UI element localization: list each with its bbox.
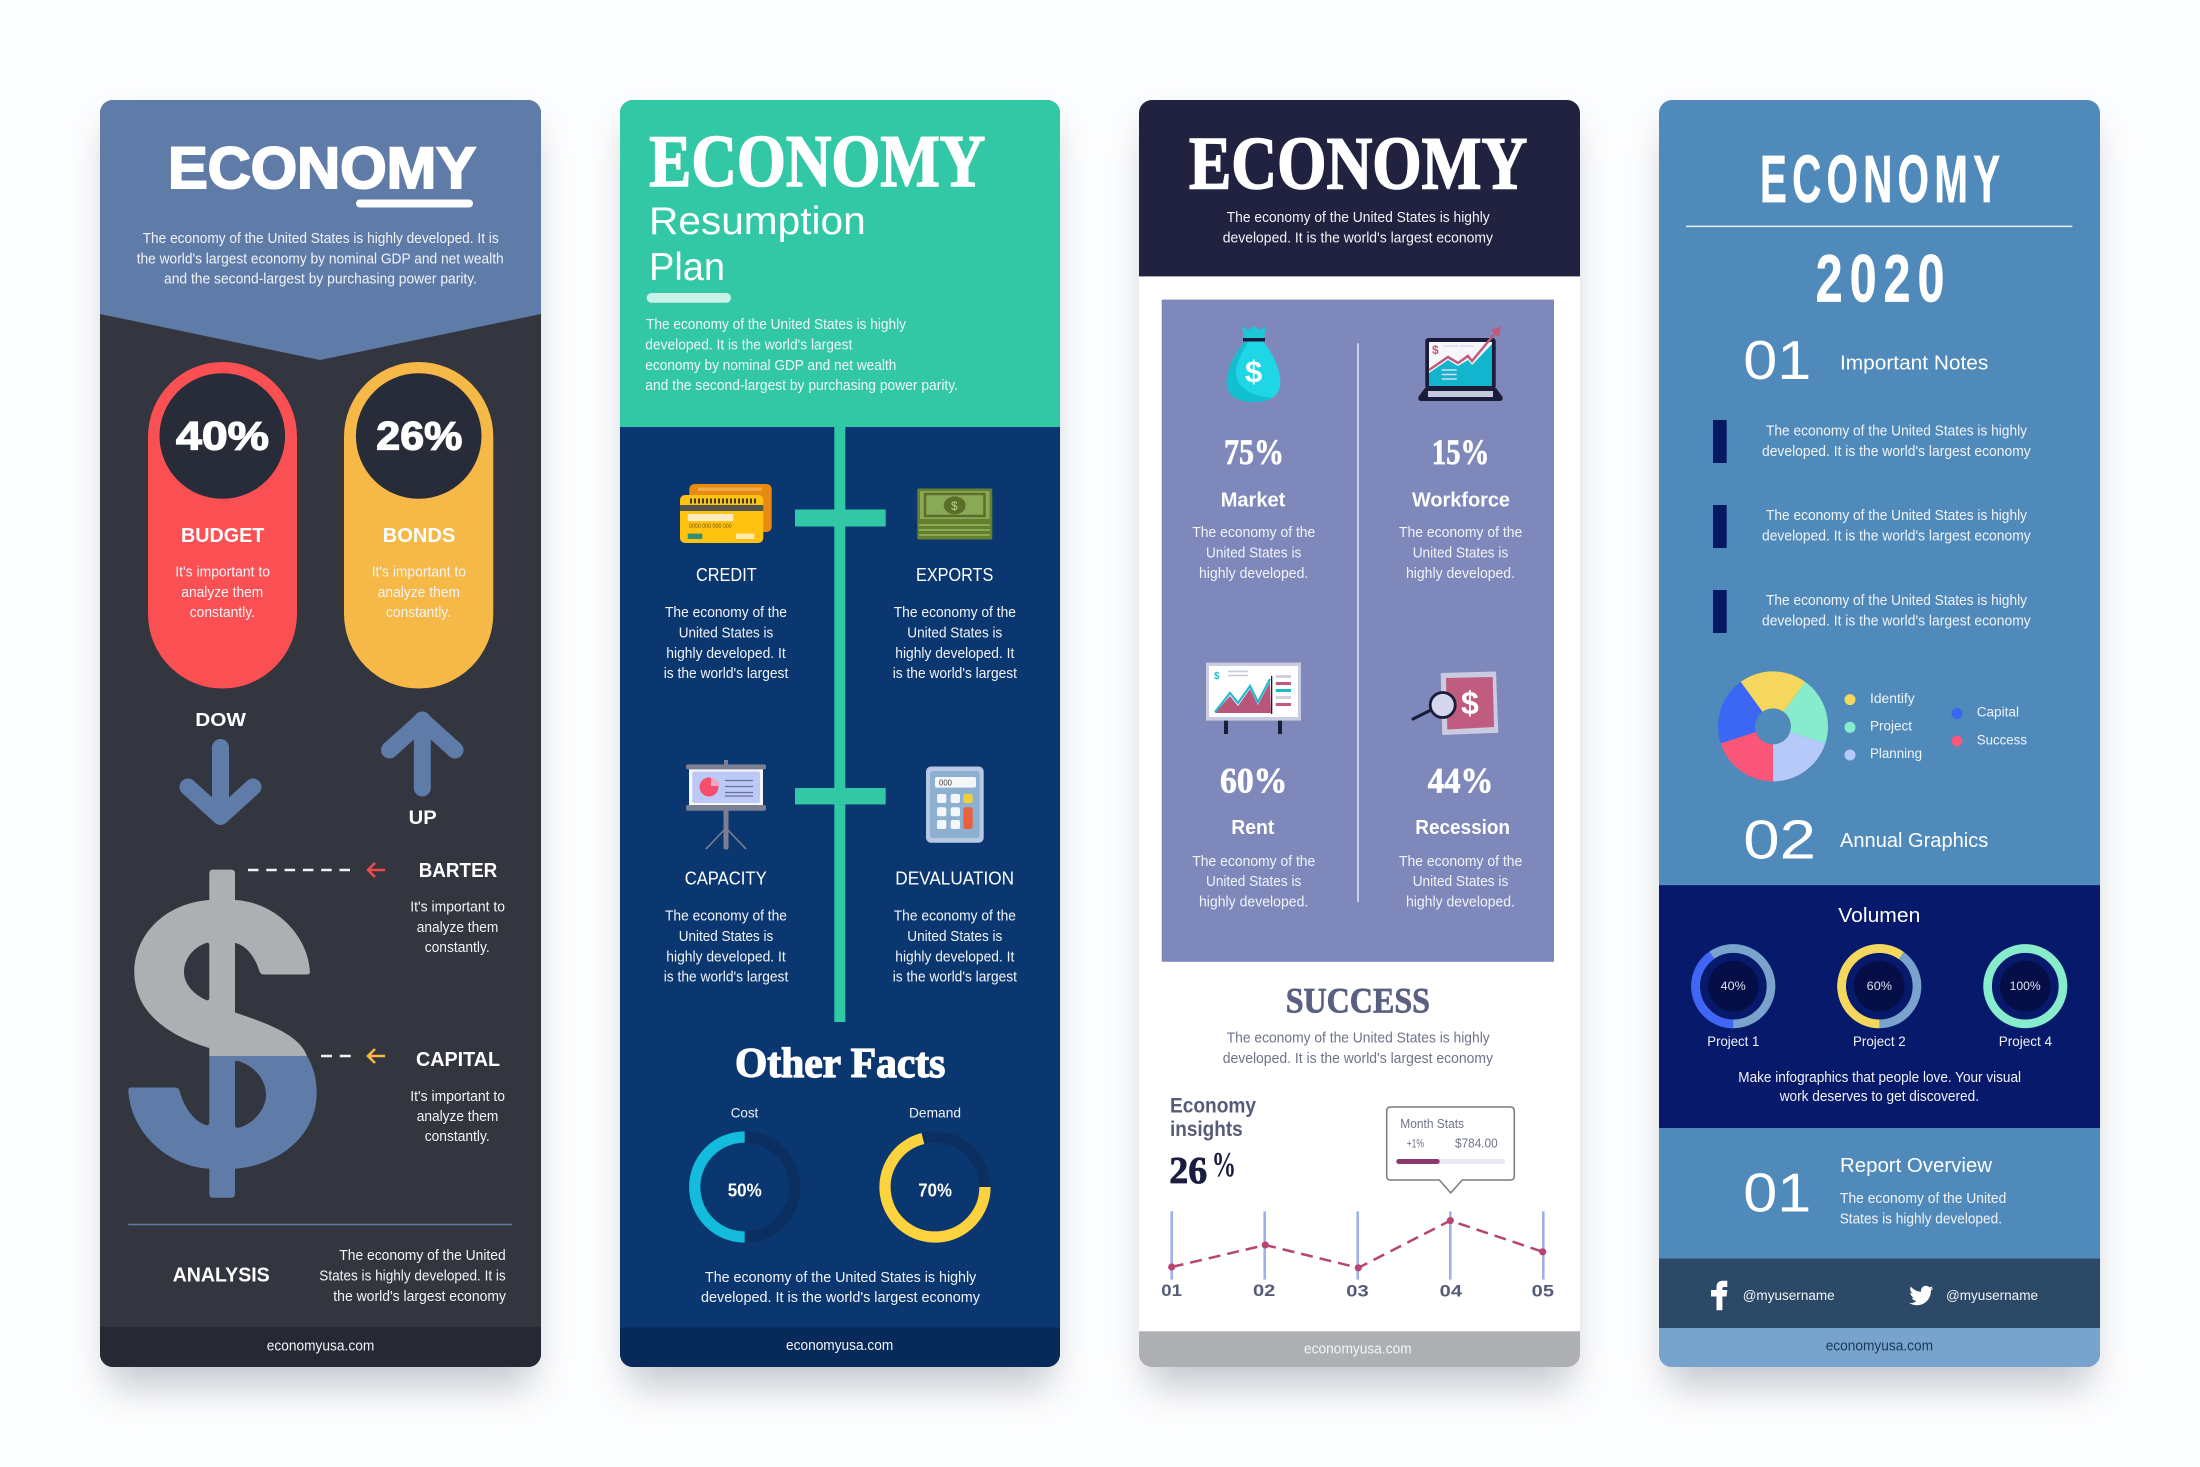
subtitle: Plan — [649, 246, 725, 289]
icon: money bag — [1227, 326, 1280, 402]
capacity block: The economy of the — [665, 908, 787, 924]
icon: presentation board — [686, 760, 766, 850]
intro text: and the second-largest by purchasing power parity. — [645, 378, 958, 394]
stat: market: highly developed. — [1199, 566, 1308, 582]
arrow: up — [390, 720, 455, 788]
pill: budget — [148, 362, 297, 688]
stat: market — [1192, 432, 1315, 582]
barter text: It's important to — [410, 900, 505, 916]
pill: budget: 40% — [176, 415, 269, 459]
volumen text: work deserves to get discovered. — [1779, 1089, 1979, 1105]
line chart: 01 — [1161, 1281, 1182, 1300]
ring: project 1: Project 1 — [1707, 1033, 1759, 1049]
pie legend: Planning — [1870, 746, 1922, 761]
ring: project 2: Project 2 — [1853, 1033, 1906, 1049]
capital text: It's important to — [410, 1089, 505, 1105]
intro text — [1223, 210, 1494, 246]
header banner — [100, 100, 541, 360]
donut: demand: 70% — [918, 1181, 952, 1201]
line chart: 02 — [1253, 1281, 1275, 1300]
section 02 heading — [1743, 809, 1988, 871]
pill: budget: analyze them — [181, 585, 263, 601]
line chart: 05 — [1532, 1282, 1554, 1300]
icon: calculator: 000 — [939, 778, 953, 788]
ring: project 1 — [1696, 948, 1771, 1049]
stat: recession — [1399, 761, 1522, 911]
stat: rent: Rent — [1231, 817, 1275, 839]
icon: magnifier on dollar — [1413, 672, 1498, 735]
exports block — [893, 564, 1017, 682]
report overview — [1743, 1155, 2006, 1228]
capital text: CAPITAL — [416, 1049, 500, 1071]
barter text: analyze them — [417, 920, 498, 936]
section 01 heading — [1743, 329, 1988, 391]
icon: credit card — [680, 484, 772, 543]
footer: economyusa.com — [267, 1338, 374, 1354]
label: dow: DOW — [195, 709, 247, 730]
footer — [620, 1328, 1060, 1367]
icon: magnifier on dollar: $ — [1461, 685, 1479, 721]
heading: other facts: Other Facts — [735, 1041, 945, 1087]
devaluation block: United States is — [907, 929, 1002, 945]
report overview: 01 — [1743, 1161, 1811, 1223]
pill: bonds: 26% — [376, 415, 462, 459]
barter text — [410, 860, 505, 956]
note 3: The economy of the United States is highly — [1766, 593, 2028, 609]
stat: market: 75% — [1224, 432, 1284, 472]
panel: economy budget and bonds — [100, 100, 541, 1367]
title: ECONOMY — [1189, 122, 1527, 206]
pill: budget: constantly. — [190, 605, 255, 621]
credit block: United States is — [679, 626, 773, 642]
footer: economyusa.com — [1826, 1338, 1933, 1354]
analysis text: the world's largest economy — [333, 1289, 507, 1305]
icon: chart board: $ — [1214, 671, 1220, 682]
line chart: 04 — [1440, 1282, 1463, 1300]
pill: bonds: constantly. — [386, 605, 451, 621]
footer: economyusa.com — [1304, 1342, 1412, 1358]
economy insights label: % — [1212, 1144, 1236, 1184]
stat: market: United States is — [1206, 546, 1301, 562]
note 1: developed. It is the world's largest economy — [1762, 444, 2031, 460]
pill: budget: It's important to — [175, 564, 270, 580]
pie legend — [1844, 691, 2027, 761]
stat: workforce: The economy of the — [1399, 525, 1522, 541]
subtitle: Resumption — [649, 200, 866, 243]
donut: demand: Demand — [909, 1104, 961, 1120]
icon: laptop chart: $ — [1432, 343, 1439, 357]
timeline cross — [795, 427, 886, 1022]
ring: project 1: 40% — [1721, 979, 1746, 993]
tooltip callout: $784.00 — [1455, 1136, 1498, 1150]
stat: rent: highly developed. — [1199, 895, 1308, 911]
closing text: The economy of the United States is highly — [705, 1270, 977, 1286]
intro text: The economy of the United States is highly developed. It is — [143, 231, 499, 247]
social band — [1659, 1258, 2100, 1328]
arrow: barter pointer — [368, 863, 385, 877]
report overview: The economy of the United — [1840, 1191, 2006, 1207]
pill: bonds: analyze them — [378, 585, 460, 601]
stats panel — [1162, 300, 1554, 962]
volumen band: Volumen — [1838, 905, 1920, 927]
stat: workforce: Workforce — [1412, 489, 1510, 511]
credit block — [664, 564, 788, 682]
stat: rent: The economy of the — [1192, 854, 1315, 870]
note 2: The economy of the United States is highly — [1766, 508, 2028, 524]
capital text — [410, 1049, 505, 1145]
note 1 — [1713, 420, 2031, 463]
stat: recession: Recession — [1415, 817, 1510, 839]
stat: recession: highly developed. — [1406, 895, 1515, 911]
icon: banknotes: $ — [951, 499, 958, 513]
arrow: down — [188, 748, 253, 816]
social band: @myusername — [1743, 1288, 1835, 1303]
devaluation block: The economy of the — [894, 908, 1016, 924]
panel: economy success — [1139, 100, 1580, 1367]
pie legend: Capital — [1977, 705, 2019, 720]
intro text — [645, 317, 958, 394]
intro text: developed. It is the world's largest — [645, 338, 852, 354]
heading: success: SUCCESS — [1286, 981, 1430, 1021]
devaluation block: highly developed. It — [895, 950, 1014, 966]
stat: rent: United States is — [1206, 874, 1301, 890]
pie legend: Identify — [1870, 691, 1915, 706]
intro text: developed. It is the world's largest economy — [1223, 230, 1494, 246]
analysis text: States is highly developed. It is — [319, 1268, 506, 1284]
section 02 heading: 02 — [1743, 809, 1816, 871]
intro text: The economy of the United States is highly — [646, 317, 907, 333]
icon: money bag: $ — [1245, 354, 1262, 389]
title: ECONOMY — [649, 121, 985, 203]
intro text: economy by nominal GDP and net wealth — [645, 358, 896, 374]
ring: project 4: 100% — [2010, 979, 2041, 993]
stat: workforce: highly developed. — [1406, 566, 1515, 582]
capacity block — [664, 867, 788, 986]
stat: rent: 60% — [1220, 761, 1287, 801]
section 02 heading: Annual Graphics — [1840, 830, 1988, 852]
line chart: 03 — [1346, 1282, 1369, 1300]
stat: market: The economy of the — [1192, 525, 1315, 541]
credit block: CREDIT — [696, 564, 757, 585]
capital text: analyze them — [417, 1109, 498, 1125]
year: 2020 — [1816, 242, 1952, 316]
report overview: States is highly developed. — [1840, 1212, 2002, 1228]
economy insights label: 26 — [1169, 1150, 1207, 1192]
stat: recession: The economy of the — [1399, 854, 1522, 870]
capacity block: is the world's largest — [664, 970, 788, 986]
credit block: The economy of the — [665, 605, 787, 621]
success text: developed. It is the world's largest economy — [1223, 1051, 1494, 1067]
volumen text — [1738, 1070, 2021, 1105]
capacity block: United States is — [679, 929, 773, 945]
exports block: The economy of the — [894, 605, 1016, 621]
pill: bonds: BONDS — [383, 525, 455, 547]
credit block: is the world's largest — [664, 666, 788, 682]
capital text: constantly. — [425, 1129, 490, 1145]
stat: recession: United States is — [1413, 874, 1508, 890]
stat: workforce — [1399, 432, 1522, 582]
note 3: developed. It is the world's largest economy — [1762, 614, 2031, 630]
icon: banknotes — [917, 488, 992, 540]
stat: recession: 44% — [1428, 761, 1493, 801]
footer — [1659, 1328, 2100, 1367]
economy insights label: insights — [1170, 1118, 1243, 1141]
label: up: UP — [409, 808, 437, 829]
note 2: developed. It is the world's largest economy — [1762, 529, 2031, 545]
economy insights label: Economy — [1170, 1094, 1256, 1118]
volumen band — [1659, 885, 2100, 1128]
icon: calculator — [926, 766, 984, 843]
title: ECONOMY — [168, 136, 476, 201]
intro text: and the second-largest by purchasing power parity. — [164, 272, 477, 288]
stat: workforce: 15% — [1432, 432, 1489, 472]
intro text — [137, 231, 504, 288]
ring: project 2: 60% — [1867, 979, 1892, 993]
analysis text: The economy of the United — [339, 1248, 506, 1264]
icon: chart board — [1206, 663, 1301, 734]
devaluation block: is the world's largest — [893, 970, 1017, 986]
closing text — [701, 1270, 981, 1306]
icon: facebook — [1711, 1281, 1727, 1310]
note 3 — [1713, 590, 2031, 633]
footer — [1139, 1331, 1580, 1367]
title underline — [356, 200, 473, 208]
header block — [620, 100, 1060, 427]
note 1: The economy of the United States is highly — [1766, 423, 2028, 439]
footer — [100, 1327, 541, 1367]
intro text: The economy of the United States is highly — [1227, 210, 1490, 226]
header block — [1139, 100, 1580, 276]
note 2 — [1713, 505, 2031, 548]
capacity block: CAPACITY — [685, 867, 767, 888]
pie legend: Project — [1870, 718, 1912, 733]
icon: laptop chart — [1418, 326, 1503, 401]
exports block: EXPORTS — [916, 564, 993, 585]
analysis text — [319, 1248, 507, 1305]
analysis heading: ANALYSIS — [173, 1265, 270, 1287]
pill: bonds — [344, 362, 493, 688]
credit block: highly developed. It — [666, 646, 786, 662]
donut: cost: Cost — [731, 1104, 758, 1120]
volumen text: Make infographics that people love. Your visual — [1738, 1070, 2021, 1086]
line chart — [1161, 1211, 1554, 1300]
report overview: Report Overview — [1840, 1155, 1993, 1177]
title: ECONOMY — [1760, 142, 2005, 217]
section 01 heading: 01 — [1743, 329, 1811, 391]
stat: workforce: United States is — [1413, 546, 1508, 562]
pill: bonds: It's important to — [372, 564, 466, 580]
tooltip callout — [1387, 1107, 1514, 1193]
donut: cost: 50% — [728, 1181, 762, 1201]
pie chart — [1718, 671, 1828, 781]
panel: economy resumption plan — [620, 100, 1060, 1367]
icon: dollar sign — [128, 870, 317, 1198]
pie legend: Success — [1977, 732, 2027, 747]
subtitle bar — [647, 293, 731, 303]
subtitle — [652, 206, 864, 280]
exports block: is the world's largest — [893, 666, 1017, 682]
ring: project 4 — [1988, 948, 2063, 1049]
panel: economy 2020 — [1659, 100, 2100, 1367]
donut: cost — [695, 1104, 795, 1237]
capacity block: highly developed. It — [666, 950, 786, 966]
icon: twitter — [1909, 1286, 1933, 1305]
section 01 heading: Important Notes — [1840, 352, 1988, 374]
exports block: United States is — [907, 626, 1002, 642]
barter text: constantly. — [425, 940, 490, 956]
devaluation block: DEVALUATION — [895, 867, 1014, 888]
economy insights label — [1169, 1094, 1256, 1192]
stat: rent — [1192, 761, 1315, 911]
social band: @myusername — [1946, 1288, 2038, 1303]
ring: project 2 — [1842, 948, 1917, 1049]
icon: credit card: 0000 000 000 000 — [689, 524, 732, 530]
success text: The economy of the United States is highly — [1227, 1030, 1490, 1046]
donut: demand — [885, 1104, 985, 1237]
tooltip callout: +1% — [1407, 1138, 1424, 1150]
success text — [1223, 1030, 1494, 1067]
exports block: highly developed. It — [895, 646, 1014, 662]
pill: budget: BUDGET — [181, 525, 264, 547]
devaluation block — [893, 867, 1017, 986]
tooltip callout: Month Stats — [1400, 1117, 1464, 1131]
ring: project 4: Project 4 — [1999, 1033, 2052, 1049]
footer: economyusa.com — [786, 1338, 893, 1354]
intro text: the world's largest economy by nominal GDP and net wealth — [137, 252, 504, 268]
arrow: capital pointer — [368, 1049, 385, 1063]
stat: market: Market — [1221, 489, 1286, 511]
closing text: developed. It is the world's largest economy — [701, 1290, 981, 1306]
barter text: BARTER — [419, 860, 498, 882]
